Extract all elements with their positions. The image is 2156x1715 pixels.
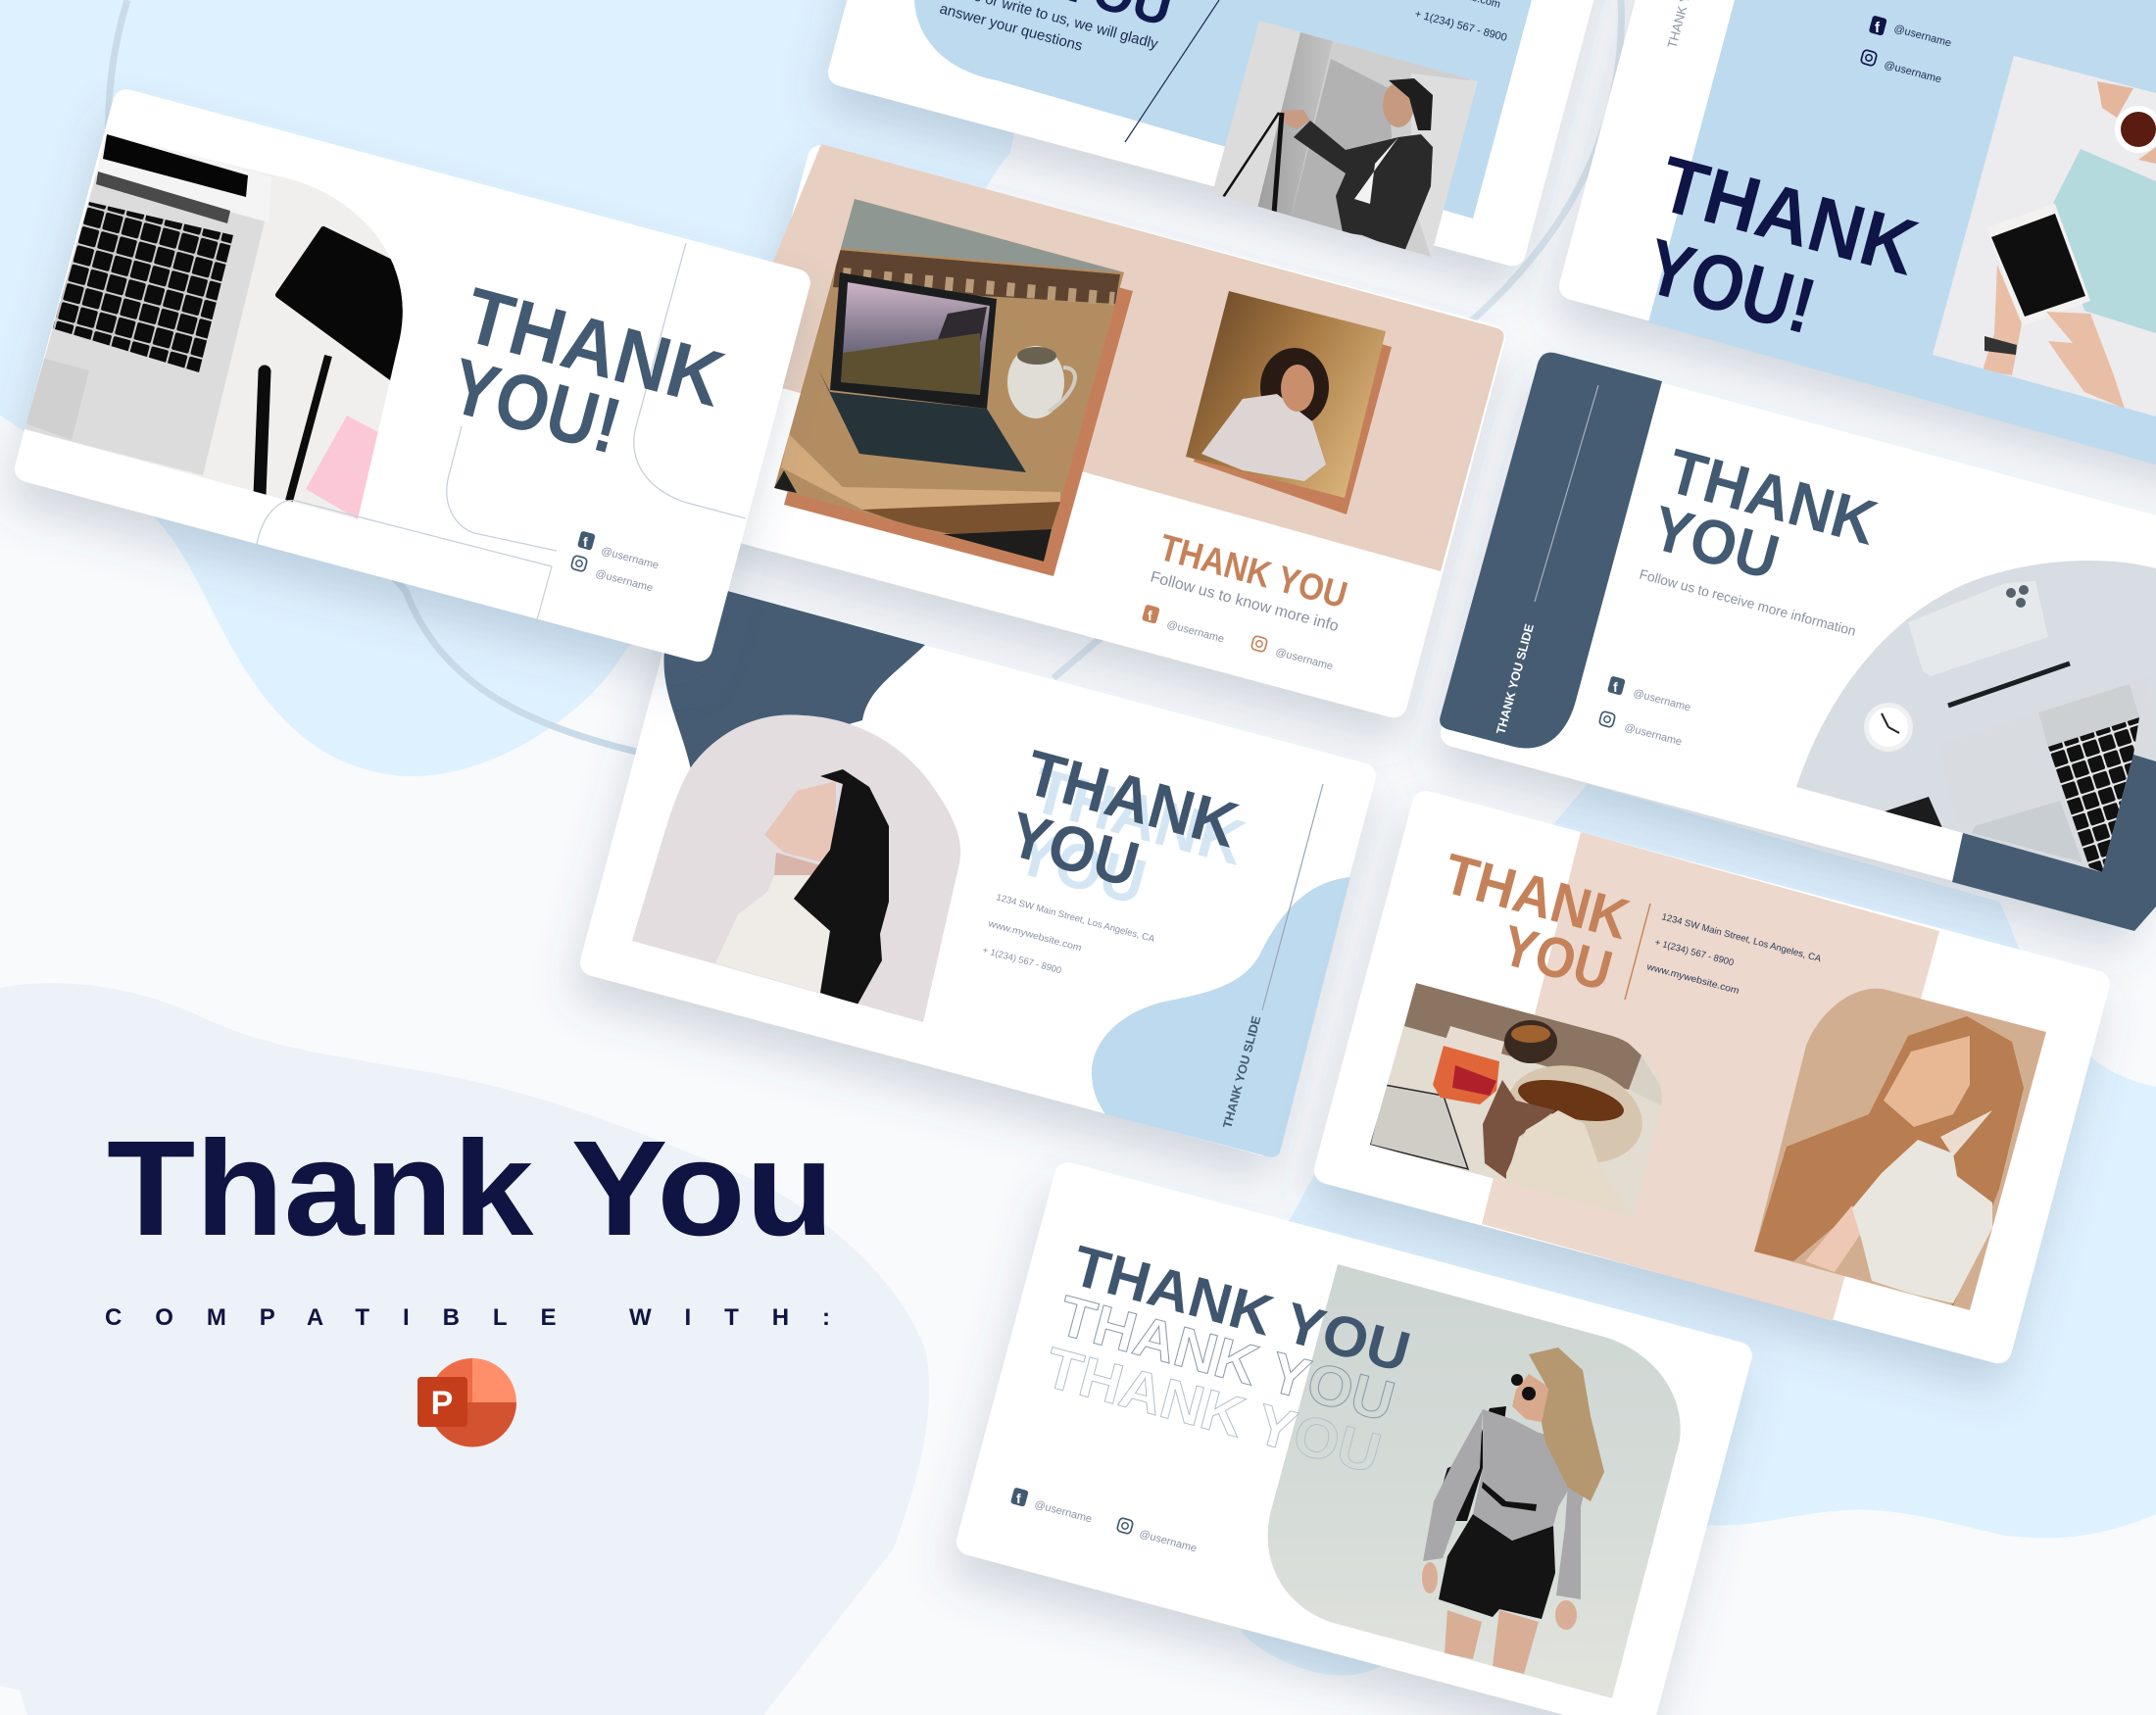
photo: woman with jacket [1214,21,1478,257]
social: instagram [570,555,654,594]
icon: PowerPoint: P [431,1385,453,1422]
slide: navy sidebar [1438,351,2156,931]
social: facebook [1010,1487,1093,1525]
photo: tea and candle [1362,980,1676,1220]
social: instagram [1116,1517,1198,1554]
headline shadow: THANK [1025,754,1252,878]
photo: tablet and hands [1921,49,2156,421]
contact details: + 1(234) 567 - 8900 [1413,8,1508,44]
decorative lines [257,243,746,623]
social: instagram [1250,635,1334,672]
main title: Thank You [107,1113,834,1264]
vertical label: THANK YOU SLIDE [1220,1014,1263,1130]
contact details: www.mywebsite.com [986,918,1083,954]
outlined headline lines: THANK YOU [1053,1284,1400,1434]
contact details [1644,911,1823,997]
blue panel [1648,0,2156,465]
headline: THANK YOU [1066,1234,1416,1385]
social: instagram: @username [1138,1528,1198,1554]
outlined headline lines: THANK YOU [1039,1336,1387,1486]
headline: THANK [1438,842,1636,952]
photo frame small [1194,304,1392,514]
headline: THANK [1660,435,1885,559]
headline: THANK [1018,736,1246,860]
social: facebook [577,530,660,571]
blue panel [914,0,1532,219]
social: facebook: f [1875,20,1881,36]
headline shadow: YOU [1008,815,1153,918]
photo: laptop, phone and pens [24,134,403,519]
body text: answer your questions [938,0,1084,55]
slide: woman in black jacket [825,0,1627,269]
social: instagram [1598,710,1683,748]
headline: YOU [1495,913,1619,1004]
headline [1438,842,1636,1004]
headline [1638,139,1927,350]
social: facebook: @username [1033,1498,1093,1525]
navy blob [663,580,925,769]
social: facebook: f [583,534,588,550]
photo: woman writing [1186,291,1386,498]
social: facebook: f [1148,608,1152,623]
contact details: www.mywebsite.com [1644,961,1740,997]
photo: woman walking [1254,1259,1690,1700]
contact details: 1234 SW Main Street, Los Angeles, CA [995,892,1156,945]
slide: peach with laptop [707,142,1508,720]
divider line [1262,784,1323,1010]
sub text: Follow us to know more info [1149,568,1341,635]
headline: THANK [1651,139,1927,292]
contact details: 1234 SW Main Street, Los Angeles, CA [1660,911,1823,965]
sub text: Follow us to receive more information [1638,565,1858,639]
contact details: + 1(234) 567 - 8900 [1653,937,1735,968]
navy corner block [1952,755,2156,931]
headline: YOU [1002,798,1147,901]
background blob: lower right light blue [1176,784,2156,1676]
social: facebook: f [1016,1491,1021,1506]
photo: laptop on wooden table [764,196,1137,568]
headline: YOU! [1638,221,1825,350]
photo: desk with phone, clock, laptop [1796,561,2156,872]
social: instagram: @username [1623,721,1683,748]
social: instagram: @username [1883,59,1942,85]
peach panel [725,144,1504,571]
photo: woman in white top [632,714,960,1022]
slide: woman with arch photo [577,580,1379,1158]
outlined headline lines [1039,1284,1400,1486]
slide: laptop and desk [0,86,813,664]
icon: PowerPoint [417,1358,516,1446]
divider line [1125,0,1219,142]
sidebar [1440,353,1662,749]
photo: woman with long hair [1749,985,2053,1318]
social: facebook: @username [1892,23,1952,49]
slide: woman walking [954,1159,1755,1715]
social: facebook [1142,604,1225,645]
divider line [1625,904,1650,1000]
slide: tea and woman, peach band [1311,788,2113,1366]
social: facebook [1607,675,1691,713]
social: instagram [1860,49,1942,85]
social: instagram: @username [594,567,654,594]
contact details: + 1(234) 567 - 8900 [981,945,1062,976]
peach band [1482,832,1939,1321]
headline: THANK YOU [1155,527,1351,616]
sidebar line [1535,385,1598,602]
blue blob [1092,877,1350,1157]
social: facebook: @username [1165,618,1225,645]
background ring [109,0,1621,752]
social: instagram: @username [1274,646,1334,672]
background blob: top light blue [0,0,1039,776]
contact details [981,892,1156,976]
background blob: bottom left lavender [0,983,929,1715]
sidebar label: THANK YOU SLIDE [1494,622,1537,736]
headline: THANK [457,270,733,423]
social: facebook: f [1613,679,1618,695]
social: facebook [1869,15,1952,49]
social: facebook: @username [1632,687,1691,713]
slide: tablet on blue [1556,0,2156,482]
photo frame [784,220,1133,576]
compatible with label: COMPATIBLE WITH: [105,1304,830,1331]
headline: YOU! [442,341,630,470]
headline: YOU [1644,492,1787,593]
social: facebook: @username [600,545,660,571]
